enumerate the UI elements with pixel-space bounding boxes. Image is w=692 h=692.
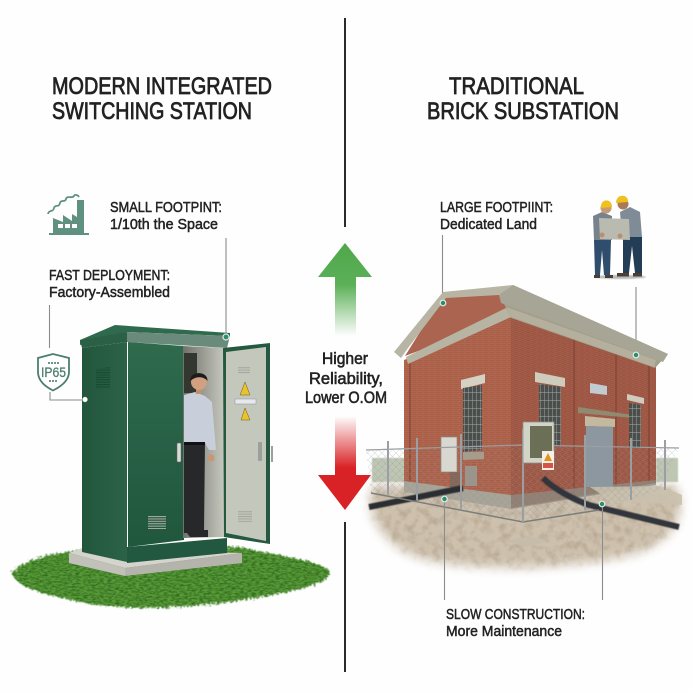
open door xyxy=(223,343,270,544)
trousers xyxy=(184,442,208,537)
right plinth xyxy=(511,480,656,509)
door latch xyxy=(258,442,273,462)
side louver xyxy=(96,367,110,389)
name plate xyxy=(590,383,607,395)
door lintel xyxy=(585,416,615,427)
leader lines: left xyxy=(50,238,226,400)
fence rails and posts xyxy=(366,429,679,522)
warning sign xyxy=(542,451,554,470)
control panel xyxy=(184,353,197,393)
grass mound xyxy=(12,547,329,608)
far window lintel xyxy=(627,394,644,404)
person xyxy=(184,373,216,537)
leader lines: bottom xyxy=(444,500,602,600)
icon: workers with block xyxy=(593,196,646,279)
far window xyxy=(629,403,641,448)
arrow: green up xyxy=(318,243,372,336)
arrow: red down xyxy=(318,416,371,510)
center caption: Lower O.OM xyxy=(305,388,387,407)
white electrical box xyxy=(441,437,457,472)
label: large footprint xyxy=(440,199,553,233)
label: large footprint: LARGE FOOTPIINT: xyxy=(440,199,553,216)
door label xyxy=(235,399,256,404)
right window lintel xyxy=(535,372,565,387)
label: slow construction: More Maintenance xyxy=(446,623,562,640)
label: slow construction xyxy=(446,606,585,640)
center caption xyxy=(305,349,387,407)
meter assembly xyxy=(450,466,477,492)
title: modern integrated switching station: MODERN INTEGRATED xyxy=(52,73,272,100)
center caption: Reliability, xyxy=(309,369,383,388)
switching cabinet xyxy=(69,325,273,576)
title: traditional brick substation xyxy=(427,73,619,125)
paving slab xyxy=(505,536,548,547)
steel door xyxy=(586,426,613,487)
front door xyxy=(128,342,184,547)
label: fast deployment: FAST DEPLOYMENT: xyxy=(49,267,170,284)
worker right xyxy=(616,196,642,276)
icon: factory xyxy=(48,195,89,235)
center caption: Higher xyxy=(322,349,368,368)
roof xyxy=(80,325,230,348)
label: fast deployment xyxy=(49,267,170,301)
shirt xyxy=(184,392,216,450)
icon: IP65 shield xyxy=(38,354,69,390)
plinth xyxy=(127,538,227,563)
leader dots: right xyxy=(440,300,639,507)
label: fast deployment: Factory-Assembled xyxy=(49,284,170,301)
label: small footprint: SMALL FOOTPINT: xyxy=(110,199,222,216)
label: slow construction: SLOW CONSTRUCTION: xyxy=(446,606,585,623)
plinth xyxy=(404,481,511,509)
horizontal concrete band xyxy=(406,308,511,364)
concrete block xyxy=(599,218,630,240)
warning signs xyxy=(240,382,250,420)
background vegetation xyxy=(372,458,678,482)
label: small footprint: 1/10th the Space xyxy=(110,216,218,233)
utility box xyxy=(523,422,554,463)
pipe right xyxy=(543,478,679,527)
title: modern integrated switching station: SWITCHING STATION xyxy=(52,98,252,125)
gable concrete rim xyxy=(394,285,513,358)
door louver xyxy=(148,516,166,529)
door step xyxy=(590,486,682,505)
leader dots: left xyxy=(82,334,229,402)
door vents xyxy=(238,367,252,523)
canopy xyxy=(578,407,633,418)
pipe left xyxy=(369,488,463,507)
underside band xyxy=(506,307,656,367)
right window xyxy=(539,384,561,447)
ground xyxy=(370,486,680,567)
substation scene xyxy=(366,285,682,567)
pilaster lines xyxy=(410,339,649,497)
label: small footprint xyxy=(110,199,222,233)
leader line: top of building xyxy=(442,235,636,354)
center divider line xyxy=(344,18,346,672)
fence mesh xyxy=(366,445,679,522)
gable brick xyxy=(405,295,511,356)
front window xyxy=(463,385,482,452)
title: modern integrated switching station xyxy=(52,73,272,125)
roof and eave backing xyxy=(499,285,668,368)
title: traditional brick substation: TRADITIONAL xyxy=(449,73,584,100)
door handle xyxy=(177,443,181,462)
worker left xyxy=(593,200,613,278)
cabinet body side xyxy=(82,342,127,562)
concrete base xyxy=(69,548,242,576)
building xyxy=(394,285,682,509)
right wall xyxy=(511,315,656,508)
title: traditional brick substation: BRICK SUBSTATION xyxy=(427,98,619,125)
front window lintel xyxy=(461,374,485,389)
door inner panel xyxy=(226,347,266,541)
cabinet interior xyxy=(183,346,224,538)
front wall xyxy=(404,315,511,508)
window sill xyxy=(463,452,484,460)
label: large footprint: Dedicated Land xyxy=(440,216,537,233)
icon: IP65 shield: IP65 xyxy=(41,365,66,380)
head xyxy=(190,373,208,394)
roof top band xyxy=(499,285,668,362)
